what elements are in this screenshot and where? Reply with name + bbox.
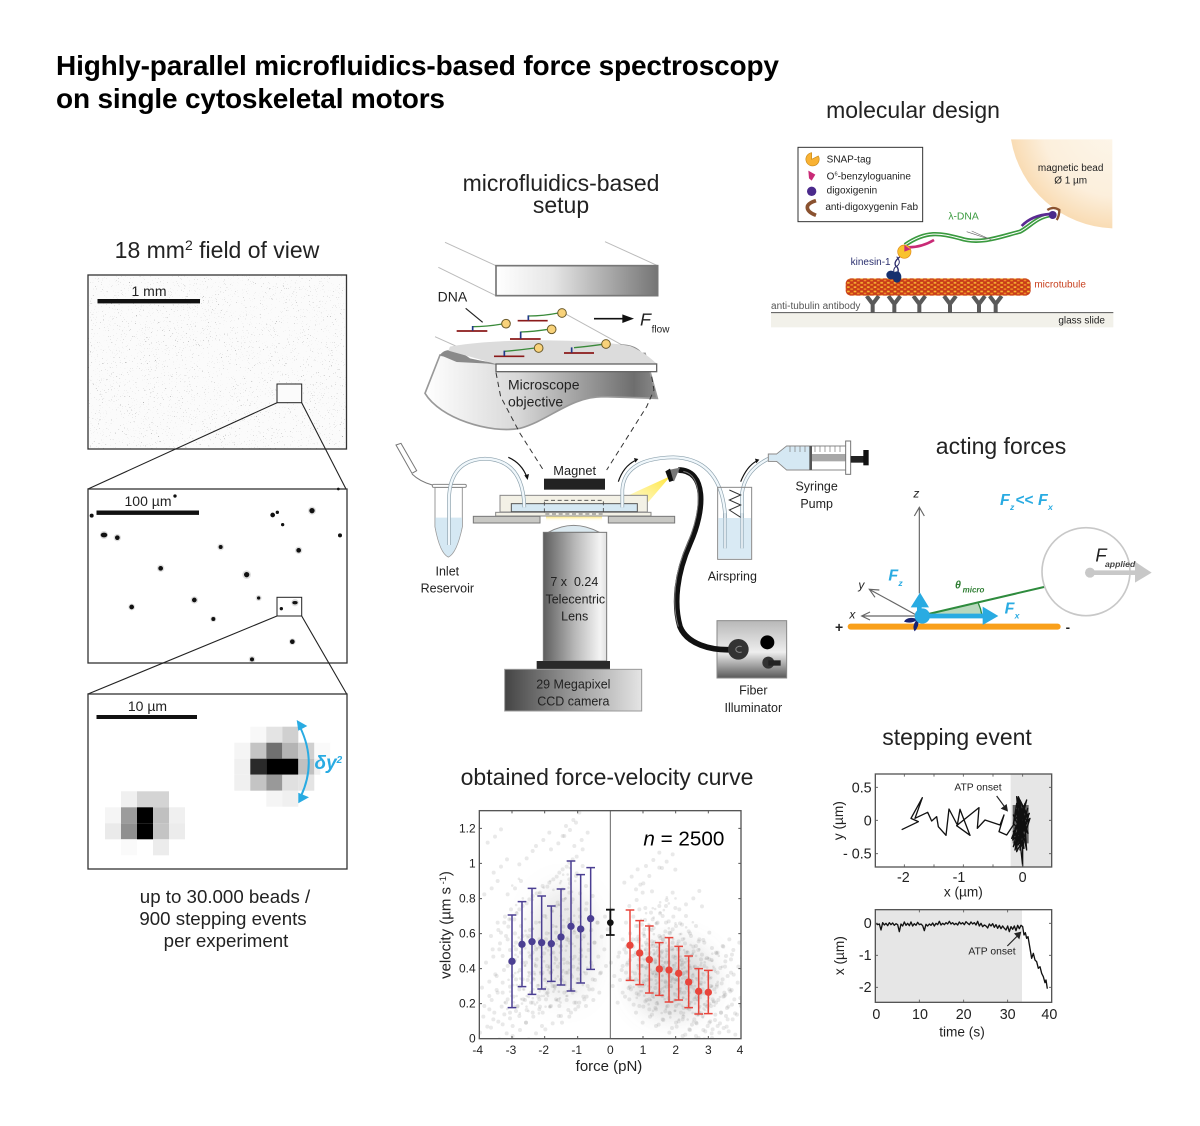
Fab and digoxigenin at bead	[1047, 208, 1059, 220]
syringe pump	[768, 441, 869, 511]
DNA angle: θ	[955, 579, 961, 591]
fiber head	[665, 468, 680, 482]
axes: 1	[640, 1043, 647, 1057]
axes: 4	[737, 1043, 744, 1057]
magnet: Magnet	[553, 463, 596, 478]
objective rim	[440, 344, 646, 364]
microtubule track: +	[835, 619, 843, 635]
chart: x-time trace: 0	[872, 1007, 880, 1023]
fiber cable	[675, 470, 737, 650]
bead and applied force: F	[1095, 544, 1108, 565]
telecentric lens: 7 x 0.24	[550, 575, 598, 589]
syringe pump: Pump	[800, 497, 833, 511]
axes: n = 2500	[643, 828, 724, 851]
axes: 0.6	[459, 927, 476, 941]
axes: 0	[469, 1032, 476, 1046]
chart: x-y trace: ATP onset	[954, 783, 1002, 794]
arrow: F flow: F	[640, 310, 652, 330]
force arrows	[888, 492, 1054, 631]
light from illuminator	[628, 476, 671, 502]
objective top surface	[448, 340, 657, 364]
telecentric lens: Lens	[561, 610, 588, 624]
axes: -4	[472, 1043, 483, 1057]
antibodies	[771, 296, 1002, 313]
dashed light cone	[496, 373, 654, 470]
DNA tethers	[457, 309, 610, 356]
SNAP-tag bead	[898, 245, 911, 258]
telecentric lens	[543, 525, 607, 661]
diagram: microfluidic instrument	[396, 441, 869, 715]
error bar: zero force	[606, 910, 615, 935]
legend	[798, 147, 923, 222]
chart: x-y trace: - 0.5	[843, 847, 872, 863]
antibodies: anti-tubulin antibody	[771, 301, 860, 312]
legend: -benzyloguanine	[838, 171, 911, 182]
label: DNA	[438, 289, 483, 322]
panel: 100 um view: 100 µm	[125, 493, 171, 509]
axes: 0	[607, 1043, 614, 1057]
legend: digoxigenin	[827, 185, 877, 196]
panel: 10 um pixel view: 10 µm	[128, 698, 167, 714]
illuminator box: Illuminator	[725, 701, 782, 715]
force arrows: z	[897, 578, 903, 588]
chart: x-time trace: 10	[912, 1007, 928, 1023]
panel: 100 um view	[88, 488, 347, 663]
chart: x-y trace	[831, 774, 1052, 900]
heading: force-velocity curve: obtained force-velocity curve	[461, 764, 753, 790]
arrow: F flow	[594, 310, 670, 335]
chart: x-time trace: ATP onset	[968, 947, 1016, 958]
chart: x-y trace: -2	[897, 870, 910, 886]
heading: field of view: 2	[185, 237, 193, 253]
airspring beaker	[708, 487, 757, 584]
flow direction arrows	[508, 457, 759, 482]
arrow: delta y arc	[297, 720, 343, 803]
microtubule	[846, 278, 1086, 296]
bead and applied force: applied	[1105, 559, 1136, 569]
kinesin motor: kinesin-1	[851, 257, 891, 268]
lambda DNA	[905, 211, 1052, 247]
axes: y	[857, 578, 865, 592]
zoom lines: overview to middle panel	[88, 403, 346, 489]
label: microscope objective: objective	[508, 394, 563, 410]
error bars: positive force	[626, 910, 713, 1014]
diagram: molecular design	[771, 139, 1113, 327]
axes: force (pN)	[576, 1058, 642, 1075]
label: microscope objective: Microscope	[508, 376, 580, 392]
heading: setup: setup	[533, 192, 589, 218]
scatter cloud	[476, 813, 747, 1041]
top slab	[496, 266, 658, 296]
force arrows: F	[1038, 492, 1049, 509]
chart: x-time trace: -1	[859, 948, 872, 964]
chart: x-time trace: time (s)	[939, 1025, 985, 1040]
caption: bead counts: up to 30.000 beads /	[140, 886, 311, 907]
arrow: delta y arc: 2	[336, 755, 343, 766]
fiber connector knob	[728, 639, 749, 660]
objective body	[425, 353, 657, 429]
microtubule: microtubule	[1034, 280, 1086, 291]
heading: molecular design: molecular design	[826, 97, 1000, 123]
axes: 1	[469, 856, 476, 870]
cover slide	[496, 364, 657, 372]
diagram: flow cell and objective	[425, 242, 670, 470]
caption: bead counts	[139, 886, 311, 951]
bead image: second bead	[105, 791, 185, 855]
legend: SNAP-tag	[827, 154, 871, 165]
glass slide	[771, 313, 1113, 327]
chart: x-time trace: 0	[864, 916, 872, 932]
kinesin motor	[851, 257, 901, 283]
DNA angle: micro	[963, 585, 985, 594]
chart: x-y trace: 0	[1019, 870, 1027, 886]
error bars: negative force	[508, 861, 595, 1008]
chart: force-velocity scatter	[438, 811, 747, 1075]
heading: field of view: 18 mm	[115, 237, 185, 263]
lambda DNA: λ-DNA	[948, 211, 979, 222]
axes	[848, 486, 924, 622]
label: DNA: DNA	[438, 289, 468, 305]
force arrows: F	[1005, 600, 1016, 617]
panel: 1 mm overview	[88, 275, 346, 449]
magnet	[544, 463, 605, 490]
microtubule track	[835, 619, 1070, 635]
chart: x-time trace: 40	[1041, 1007, 1057, 1023]
diagram: acting forces	[835, 486, 1152, 635]
title: on single cytoskeletal motors	[56, 83, 445, 114]
telecentric lens: Telecentric	[545, 592, 605, 606]
axes: )	[438, 871, 455, 876]
inlet reservoir: Reservoir	[421, 582, 474, 596]
chart: x-y trace: x (µm)	[944, 885, 983, 900]
caption: bead counts: 900 stepping events	[139, 908, 307, 929]
title: Highly-parallel microfluidics-based force spectroscopy	[56, 50, 779, 81]
title	[56, 50, 779, 114]
illuminator box	[717, 621, 787, 715]
chart: x-y trace: 0	[864, 813, 872, 829]
CCD camera: 29 Megapixel	[536, 677, 610, 691]
chart: x-y trace: y (µm)	[831, 801, 846, 840]
syringe pump: Syringe	[795, 480, 838, 494]
axes: 2	[672, 1043, 679, 1057]
force arrows: x	[1014, 610, 1021, 620]
bead image: stepping bead	[234, 727, 330, 807]
axes	[438, 811, 744, 1075]
flow cell	[473, 495, 675, 523]
chart: x-y trace: -1	[953, 870, 965, 886]
heading: field of view: field of view	[193, 237, 320, 263]
axes: -3	[506, 1043, 517, 1057]
force arrows: F	[888, 568, 899, 585]
heading: setup	[463, 170, 659, 218]
arrow: F flow: flow	[652, 324, 670, 335]
force arrows: x	[1047, 502, 1054, 512]
zoom lines: middle panel to bottom panel	[88, 616, 347, 694]
axes: -1	[571, 1043, 582, 1057]
heading: acting forces: acting forces	[936, 433, 1066, 459]
panel: 1 mm overview: 1 mm	[132, 283, 166, 299]
axes: velocity (µm s	[438, 887, 455, 979]
heading: stepping event: stepping event	[882, 724, 1032, 750]
magnetic bead: Ø 1 µm	[1054, 175, 1087, 186]
axes: 0.2	[459, 997, 476, 1011]
magnetic bead	[1011, 139, 1112, 228]
chart: x-y trace: 0.5	[852, 780, 872, 796]
inlet reservoir: Inlet	[436, 565, 460, 579]
axes: 3	[705, 1043, 712, 1057]
force arrows: z	[1009, 502, 1015, 512]
axes: -2	[538, 1043, 549, 1057]
chart: x-time trace	[832, 910, 1057, 1040]
axes: x	[848, 608, 856, 622]
axes: -1	[438, 876, 448, 887]
magnetic bead: magnetic bead	[1038, 163, 1103, 174]
axes: z	[912, 486, 919, 500]
glass slide: glass slide	[1058, 315, 1105, 326]
DNA angle	[928, 579, 1044, 614]
airspring beaker: Airspring	[708, 570, 757, 584]
legend: O	[827, 171, 834, 182]
legend: 6	[834, 172, 838, 178]
chart: x-time trace: 30	[1000, 1007, 1016, 1023]
chart: x-time trace: -2	[859, 980, 872, 996]
panel: 10 um pixel view	[88, 694, 347, 869]
illuminator box: Fiber	[739, 684, 768, 698]
inlet reservoir	[396, 443, 474, 596]
charts: stepping event	[831, 774, 1057, 1040]
tubing	[449, 457, 772, 548]
legend: anti-digoxygenin Fab	[825, 202, 918, 213]
arrow: delta y arc: δy	[314, 753, 337, 774]
heading: setup: microfluidics-based	[463, 170, 659, 196]
label: microscope objective	[508, 376, 580, 410]
chart: x-time trace: 20	[956, 1007, 972, 1023]
axes: 0.8	[459, 892, 476, 906]
microtubule track: -	[1066, 619, 1070, 634]
CCD camera: CCD camera	[537, 694, 609, 708]
chart: x-time trace: x (µm)	[832, 936, 847, 975]
force arrows: <<	[1015, 492, 1033, 509]
caption: bead counts: per experiment	[164, 930, 289, 951]
bead and applied force	[1042, 528, 1152, 616]
axes: 1.2	[459, 821, 476, 835]
force arrows: F	[1000, 492, 1011, 509]
axes: 0.4	[459, 962, 476, 976]
CCD camera	[505, 661, 642, 711]
